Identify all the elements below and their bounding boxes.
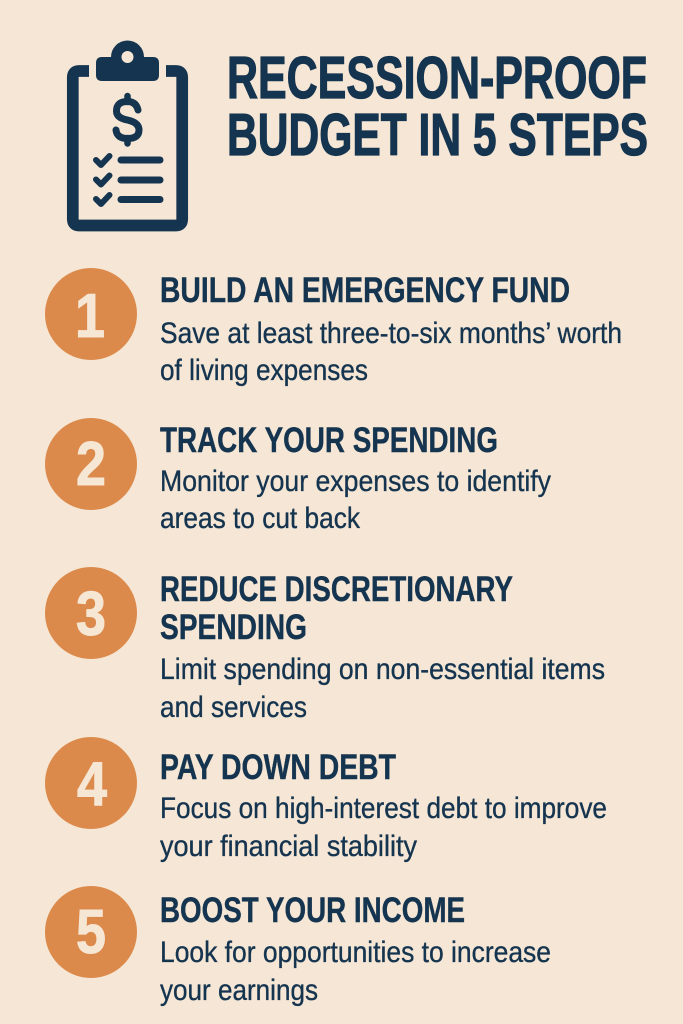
step 4 heading: PAY DOWN DEBT: [160, 748, 396, 787]
step 3: [45, 567, 605, 724]
step 3 description: [160, 653, 605, 724]
number badge 3: 3: [76, 580, 106, 649]
step 5: [45, 886, 551, 1007]
number badge 4: 4: [77, 750, 107, 819]
title: [227, 45, 648, 168]
step 4 description: your financial stability: [160, 830, 417, 863]
number badge 3: [45, 567, 137, 659]
step 3 description: Limit spending on non-essential items: [160, 653, 605, 686]
step 1: [45, 268, 622, 387]
step 2 description: areas to cut back: [160, 502, 360, 535]
number badge 5: [45, 886, 137, 978]
step 5 description: [160, 936, 551, 1007]
step 5 heading: BOOST YOUR INCOME: [160, 891, 465, 930]
step 1 heading: BUILD AN EMERGENCY FUND: [160, 271, 570, 310]
number badge 5: 5: [76, 898, 106, 967]
step 1 description: Save at least three-to-six months’ worth: [160, 317, 622, 350]
step 2: [45, 418, 551, 535]
step 4 description: [160, 792, 607, 863]
number badge 1: [45, 268, 137, 360]
step 3 heading: SPENDING: [160, 608, 307, 647]
number badge 1: 1: [75, 282, 105, 351]
step 3 description: and services: [160, 691, 307, 724]
step 5 description: Look for opportunities to increase: [160, 936, 551, 969]
step 4 description: Focus on high-interest debt to improve: [160, 792, 607, 825]
step 5 description: your earnings: [160, 974, 318, 1007]
step 2 heading: TRACK YOUR SPENDING: [160, 421, 498, 460]
step 2 description: Monitor your expenses to identify: [160, 465, 551, 498]
step 4: [45, 737, 607, 863]
step 3 heading: [160, 570, 513, 647]
number badge 4: [45, 737, 137, 829]
number badge 2: 2: [76, 430, 106, 499]
step 1 description: [160, 317, 622, 387]
step 2 description: [160, 465, 551, 535]
step 3 heading: REDUCE DISCRETIONARY: [160, 570, 513, 609]
step 1 description: of living expenses: [160, 354, 368, 387]
icon: clipboard with dollar sign and checklist: [73, 40, 182, 226]
number badge 2: [45, 418, 137, 510]
